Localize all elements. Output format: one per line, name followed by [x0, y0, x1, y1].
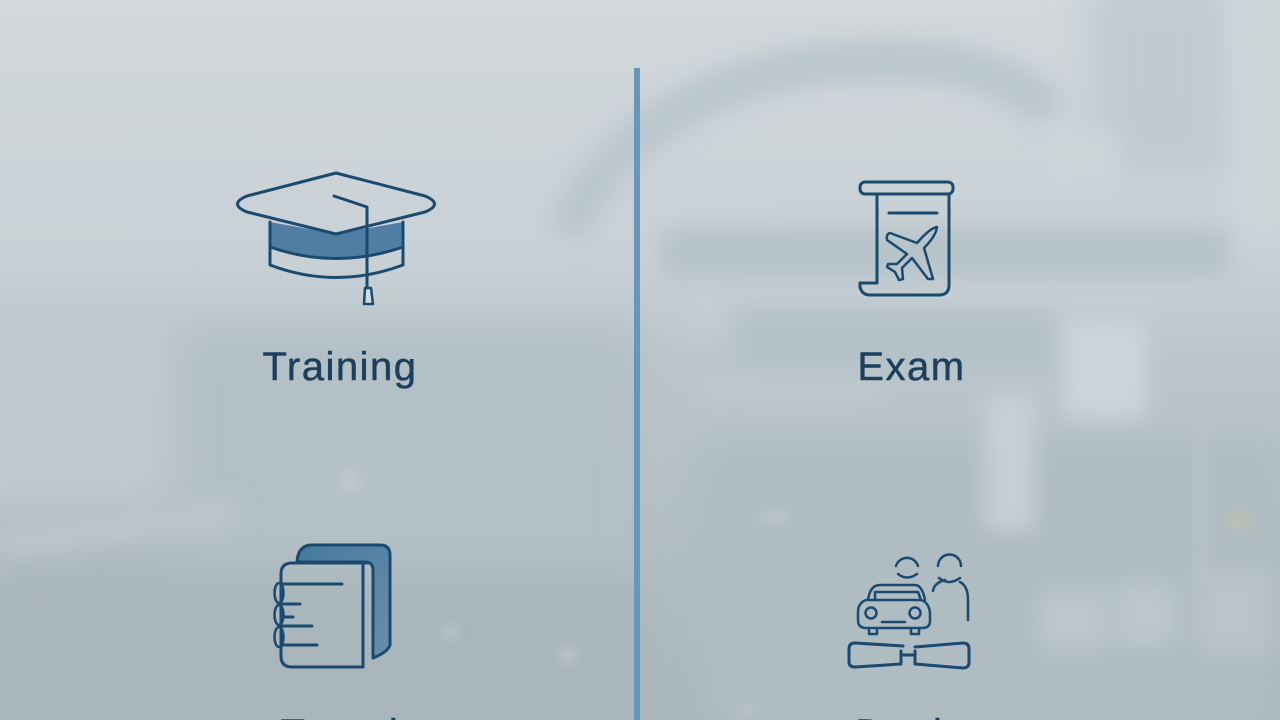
panel: travel	[274, 545, 399, 720]
panel: training	[238, 173, 434, 389]
label: Exam: Exam	[857, 345, 966, 389]
icon: car, people and ticket	[849, 554, 969, 668]
icon: scroll with airplane	[860, 182, 953, 295]
panel: deals	[849, 554, 969, 720]
panel: exam	[857, 182, 966, 389]
icon: notebook	[274, 545, 390, 667]
vertical divider	[634, 68, 640, 720]
icon: graduation cap	[238, 173, 434, 304]
label: Training: Training	[262, 345, 418, 389]
